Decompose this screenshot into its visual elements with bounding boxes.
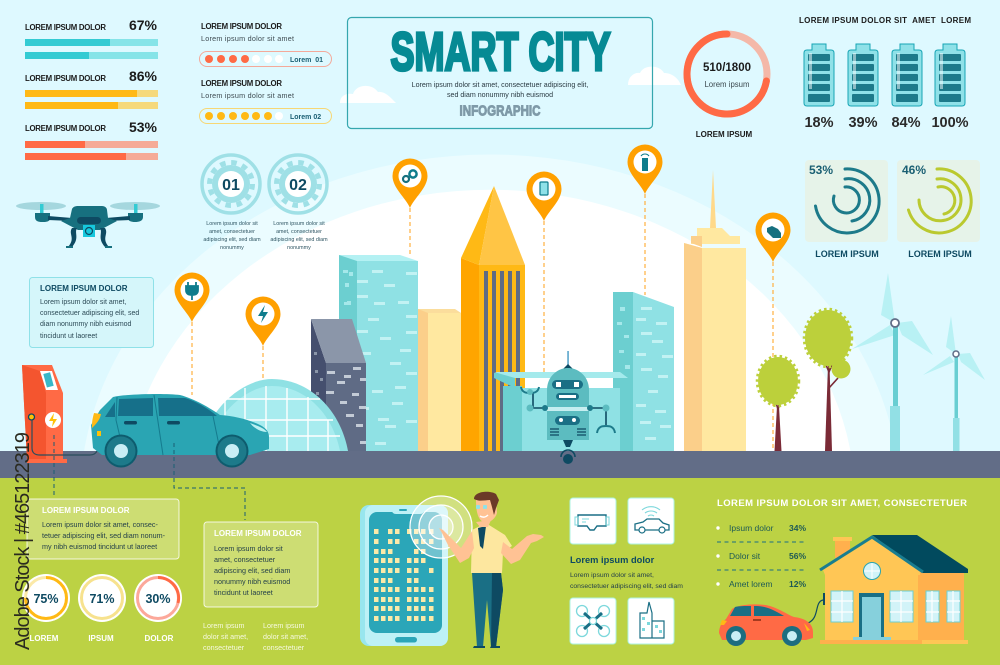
panel: rating pills: LOREM IPSUM DOLOR bbox=[201, 22, 282, 31]
icon: battery 100% bbox=[935, 44, 965, 106]
callout: left info box: Lorem ipsum dolor sit amet, bbox=[40, 299, 126, 306]
panel: progress bars bbox=[25, 17, 158, 160]
panel: numbered gears: adipiscing elit, sed diam bbox=[270, 237, 328, 243]
callout: green box 2: tincidunt ut laoreet bbox=[214, 588, 273, 597]
chart: circle 75%: 75% bbox=[33, 592, 59, 606]
icon: charging station bbox=[22, 365, 100, 463]
panel: batteries: 18% bbox=[804, 115, 834, 131]
chart: donut 510/1800: 510/1800 bbox=[703, 62, 751, 74]
callout: green box 2: nonummy nibh euismod bbox=[214, 577, 290, 586]
icon: glass dome bbox=[198, 379, 348, 451]
panel: rating pills: Lorem ipsum dolor sit amet bbox=[201, 34, 294, 43]
panel: progress bars: 86% bbox=[129, 68, 158, 84]
panel: numbered gears: 01 bbox=[222, 177, 240, 194]
panel: title box bbox=[348, 18, 652, 128]
text: tile copy: Lorem ipsum dolor sit amet, bbox=[570, 572, 654, 579]
panel: progress bars: 53% bbox=[129, 119, 158, 135]
icon: quadcopter bbox=[570, 598, 616, 644]
text: tile copy bbox=[570, 555, 683, 590]
chart: radial 46% bbox=[897, 160, 980, 259]
chart: donut 510/1800: Lorem ipsum bbox=[704, 80, 750, 89]
chart: circle 75% bbox=[22, 574, 70, 643]
touch rings bbox=[410, 496, 472, 558]
panel: stats list: 12% bbox=[789, 579, 806, 589]
chart: radial 46%: LOREM IPSUM bbox=[908, 249, 972, 259]
road bbox=[0, 451, 1000, 478]
panel: title box: Lorem ipsum dolor sit amet, consectetuer adipiscing elit, bbox=[412, 81, 588, 89]
clouds bbox=[340, 67, 681, 103]
text columns: dolor sit amet, bbox=[203, 632, 248, 641]
panel: rating pills bbox=[200, 22, 332, 124]
callout: green box 2 bbox=[204, 522, 318, 607]
text columns: Lorem ipsum bbox=[203, 621, 245, 630]
callout: left info box: LOREM IPSUM DOLOR bbox=[40, 284, 128, 293]
chart: circle 71%: IPSUM bbox=[88, 634, 114, 643]
building: right teal bbox=[613, 292, 674, 451]
text columns: Lorem ipsum bbox=[263, 621, 305, 630]
panel: title box: INFOGRAPHIC bbox=[460, 104, 541, 120]
building: gray bbox=[311, 319, 366, 451]
chart: donut 510/1800: LOREM IPSUM bbox=[696, 130, 753, 139]
panel: rating pills: Lorem ipsum dolor sit amet bbox=[201, 91, 294, 100]
text columns: consectetuer bbox=[263, 643, 305, 652]
callout: green box 1: my nibh euismod tincidunt ut laoreet bbox=[42, 542, 157, 551]
panel: rating pills: LOREM IPSUM DOLOR bbox=[201, 79, 282, 88]
building: tall teal bbox=[339, 255, 418, 451]
text: tile copy: consectetuer adipiscing elit, sed diam bbox=[570, 583, 683, 590]
panel: icon tiles bbox=[570, 498, 683, 644]
panel: stats list: 56% bbox=[789, 551, 806, 561]
icon: connected car bbox=[628, 498, 674, 544]
chart: circle 71%: 71% bbox=[89, 592, 115, 606]
trees bbox=[757, 309, 852, 451]
dashed connectors to boxes bbox=[54, 435, 245, 520]
chart: circle 30% bbox=[134, 574, 182, 643]
icon: smartphone bbox=[360, 496, 472, 646]
icon: city bbox=[628, 598, 674, 644]
icon: electric car bbox=[91, 394, 269, 468]
icon: drone bbox=[16, 202, 160, 248]
panel: batteries: LOREM IPSUM DOLOR SIT AMET LOREM bbox=[799, 16, 971, 25]
icon: robot bbox=[521, 351, 615, 464]
icon: battery 18% bbox=[804, 44, 834, 106]
illustration: man bbox=[439, 492, 544, 648]
illustration: house bbox=[820, 535, 968, 644]
panel: stats list: LOREM IPSUM DOLOR SIT AMET, CONSECTETUER bbox=[717, 498, 967, 509]
illustration: red car bbox=[719, 593, 824, 646]
panel: numbered gears: nonummy bbox=[287, 245, 311, 251]
panel: stats list: Dolor sit bbox=[729, 551, 761, 561]
panel: numbered gears: adipiscing elit, sed diam bbox=[203, 237, 261, 243]
icon: vr glasses bbox=[570, 498, 616, 544]
callout: left info box: diam nonummy nibh euismod bbox=[40, 321, 132, 328]
panel: stats list: Amet lorem bbox=[729, 579, 772, 589]
icon: pin hand bbox=[756, 212, 790, 262]
callout: green box 1 bbox=[27, 499, 179, 559]
panel: numbered gears: amet, consectetuer bbox=[209, 229, 255, 235]
building: robot lab bbox=[494, 372, 628, 451]
callout: left info box: consectetuer adipiscing elit, sed bbox=[40, 310, 139, 317]
title: SMART CITY bbox=[390, 22, 610, 82]
callout: green box 2: adipiscing elit, sed diam bbox=[214, 566, 290, 575]
panel: progress bars: LOREM IPSUM DOLOR bbox=[25, 74, 106, 83]
chart: donut 510/1800 bbox=[687, 34, 767, 139]
icon: pin gears bbox=[392, 158, 428, 208]
icon: pin phone bbox=[526, 172, 562, 221]
panel: batteries: 39% bbox=[848, 115, 878, 131]
panel: numbered gears: nonummy bbox=[220, 245, 244, 251]
phone city windows bbox=[374, 529, 434, 621]
chart: radial 53% bbox=[805, 160, 888, 259]
panel: numbered gears: Lorem ipsum dolor sit bbox=[206, 221, 258, 227]
chart: circle 75%: LOREM bbox=[30, 634, 59, 643]
text columns bbox=[203, 621, 308, 652]
icon: pin plug bbox=[174, 272, 210, 322]
panel: progress bars: LOREM IPSUM DOLOR bbox=[25, 124, 106, 133]
dashed pin lines bbox=[192, 194, 773, 451]
callout: left info box: tincidunt ut laoreet bbox=[40, 333, 97, 340]
panel: numbered gears bbox=[202, 155, 328, 251]
callout: green box 2: LOREM IPSUM DOLOR bbox=[214, 529, 302, 538]
stock id vertical text: Adobe Stock | #465122319 bbox=[12, 432, 34, 650]
chart: radial 46%: 46% bbox=[902, 163, 926, 177]
callout: green box 2: amet, consectetuer bbox=[214, 555, 276, 564]
building: low yellow bbox=[418, 309, 462, 451]
chart: circle 30%: DOLOR bbox=[145, 634, 174, 643]
chart: radial 53%: 53% bbox=[809, 163, 833, 177]
text: tile copy: Lorem ipsum dolor bbox=[570, 555, 655, 565]
panel: numbered gears: 02 bbox=[289, 177, 307, 194]
chart: circle 71% bbox=[78, 574, 126, 643]
callout: left info box bbox=[30, 278, 154, 348]
panel: batteries bbox=[799, 16, 971, 131]
callout: green box 1: Lorem ipsum dolor sit amet, consec- bbox=[42, 520, 158, 529]
icon: pin bolt bbox=[246, 296, 280, 346]
text columns: consectetuer bbox=[203, 643, 245, 652]
building: tall yellow tower bbox=[684, 170, 746, 451]
panel: rating pills: Lorem 02 bbox=[290, 114, 321, 121]
callout: green box 1: tetuer adipiscing elit, sed diam nonum- bbox=[42, 531, 166, 540]
panel: batteries: 100% bbox=[931, 115, 969, 131]
ground bbox=[0, 478, 1000, 665]
callout: green box 1: LOREM IPSUM DOLOR bbox=[42, 506, 130, 515]
panel: title box: sed diam nonummy nibh euismod bbox=[447, 91, 553, 99]
sky hills background bbox=[81, 155, 899, 478]
panel: progress bars: LOREM IPSUM DOLOR bbox=[25, 23, 106, 32]
panel: batteries: 84% bbox=[891, 115, 921, 131]
panel: rating pills: Lorem 01 bbox=[290, 57, 323, 64]
callout: green box 2: Lorem ipsum dolor sit bbox=[214, 544, 283, 553]
chart: radial 53%: LOREM IPSUM bbox=[815, 249, 879, 259]
icon: pin remote bbox=[628, 144, 662, 194]
building: orange spire bbox=[461, 186, 525, 451]
panel: numbered gears: Lorem ipsum dolor sit bbox=[273, 221, 325, 227]
wind turbines bbox=[852, 273, 985, 451]
panel: progress bars: 67% bbox=[129, 17, 158, 33]
panel: stats list: Ipsum dolor bbox=[729, 523, 774, 533]
chart: circle 30%: 30% bbox=[145, 592, 171, 606]
panel: stats list bbox=[716, 498, 967, 589]
icon: battery 84% bbox=[892, 44, 922, 106]
panel: stats list: 34% bbox=[789, 523, 806, 533]
text columns: dolor sit amet, bbox=[263, 632, 308, 641]
panel: numbered gears: amet, consectetuer bbox=[276, 229, 322, 235]
icon: battery 39% bbox=[848, 44, 878, 106]
